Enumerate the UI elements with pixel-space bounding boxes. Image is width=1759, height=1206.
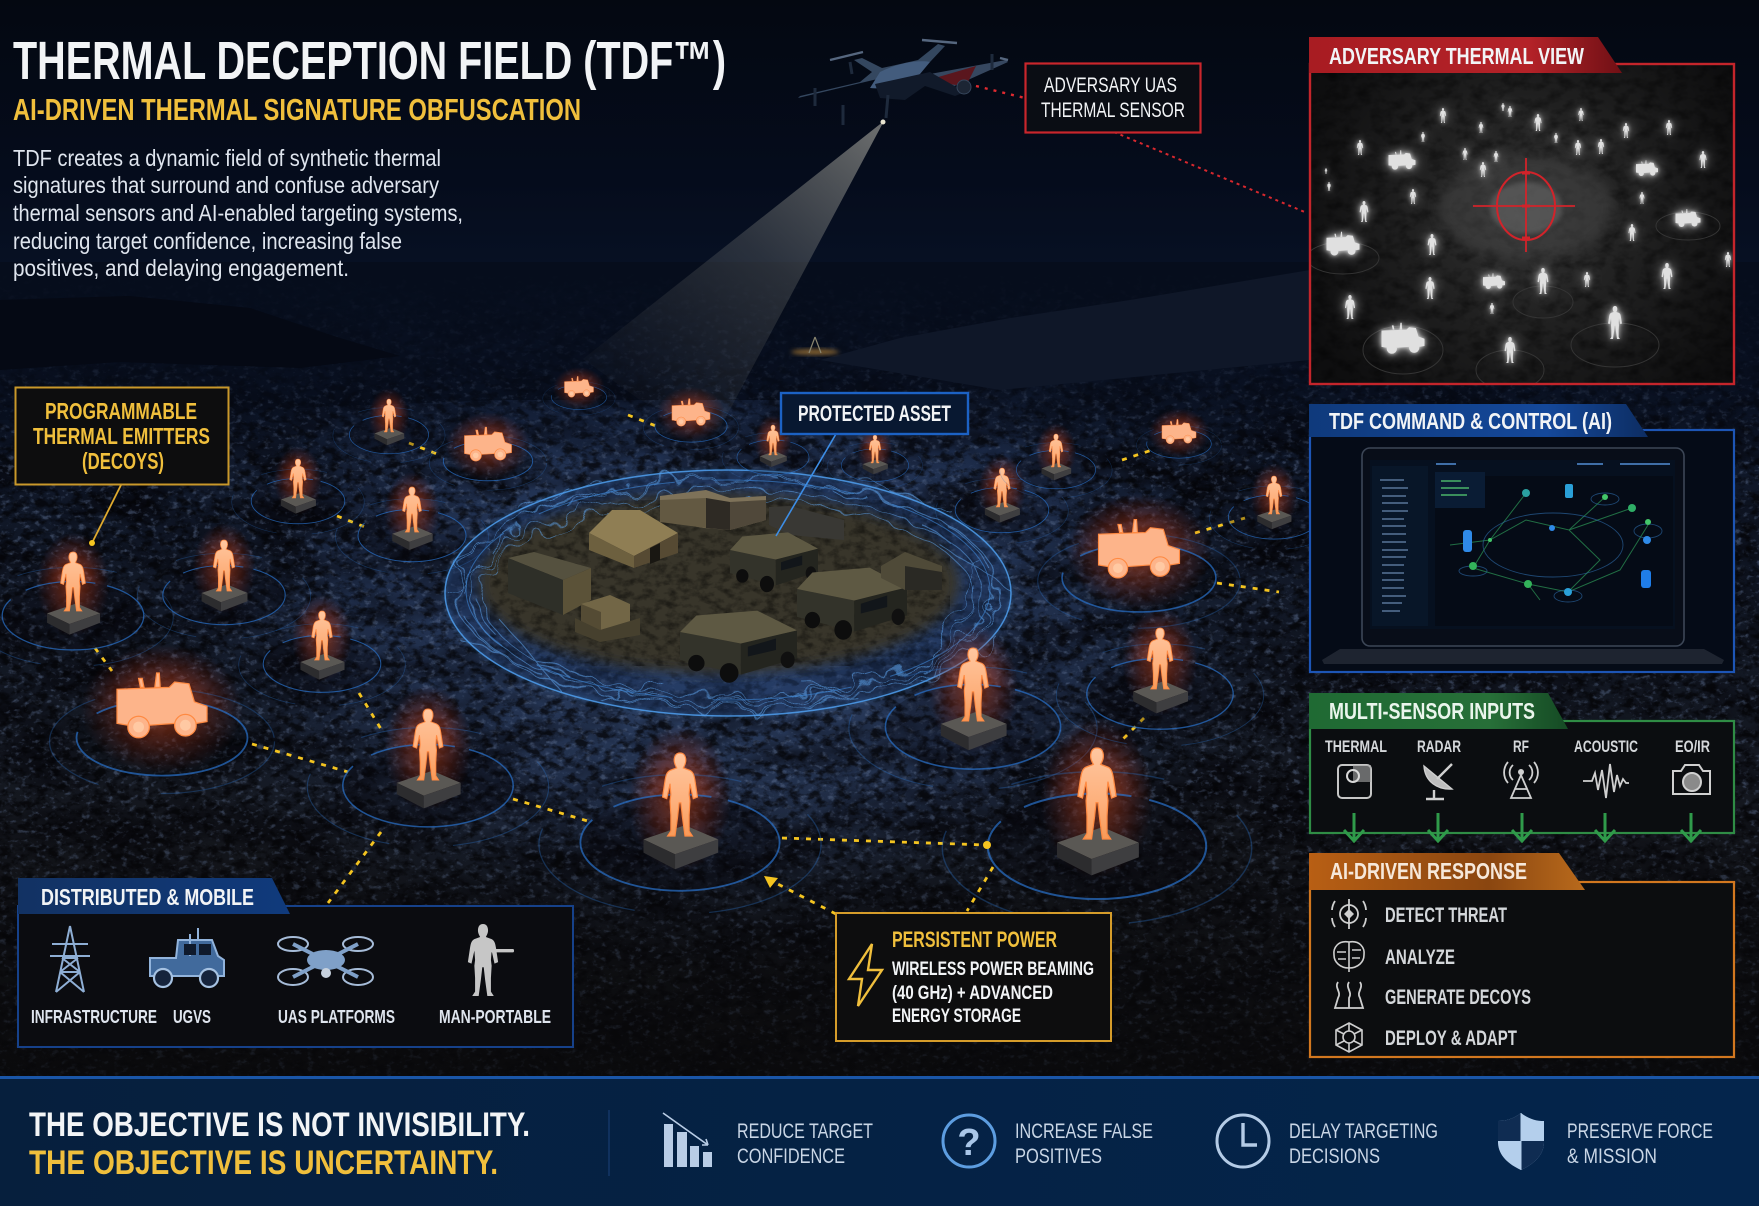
asset: cargo cluster	[881, 552, 942, 590]
callout: protected asset: PROTECTED ASSET	[798, 401, 951, 426]
yellow connector links	[95, 415, 1279, 914]
metric: delay targeting decisions	[1289, 1119, 1438, 1168]
callout: programmable thermal emitters: (DECOYS)	[82, 448, 164, 474]
sensor: acoustic	[1574, 738, 1638, 798]
decoy person west	[239, 595, 405, 706]
metric: reduce target confidence: REDUCE TARGET	[737, 1119, 873, 1143]
panel: multi-sensor inputs	[1310, 721, 1734, 841]
decoy person upper left	[232, 446, 364, 535]
icon: question mark	[943, 1115, 995, 1167]
icon: lightning bolt	[849, 944, 882, 1006]
callout: adversary UAS thermal sensor	[1026, 64, 1200, 132]
yellow node	[983, 841, 991, 849]
callout: programmable thermal emitters	[16, 388, 228, 546]
tab: command and control: TDF COMMAND & CONTROL (AI)	[1329, 408, 1612, 434]
metric: reduce target confidence	[737, 1119, 873, 1168]
metric: delay targeting decisions: DELAY TARGETING	[1289, 1119, 1438, 1143]
arrow head to dome	[764, 876, 778, 888]
icon: UGV truck	[150, 928, 224, 987]
decoy vehicle north	[644, 387, 738, 450]
sensor: acoustic: ACOUSTIC	[1574, 738, 1638, 756]
background sky	[0, 0, 1759, 300]
callout: persistent power: WIRELESS POWER BEAMING	[892, 958, 1094, 980]
tab: adversary thermal view	[1309, 37, 1622, 73]
callout: programmable thermal emitters: PROGRAMMABLE	[45, 398, 197, 424]
sensor cone beam	[583, 121, 884, 432]
callout: protected asset	[776, 393, 968, 536]
sensor: RF	[1504, 738, 1538, 798]
tab: multi-sensor inputs	[1309, 693, 1568, 729]
red dotted link: sensor label to thermal view	[1114, 132, 1307, 213]
decoy vehicle west	[49, 644, 274, 794]
decoy person south	[539, 726, 821, 914]
tab: distributed and mobile	[18, 878, 290, 914]
icon: infrastructure tower	[50, 926, 90, 992]
icon: question mark: ?	[957, 1122, 981, 1164]
sensor: radar: RADAR	[1417, 738, 1461, 756]
step: generate decoys: GENERATE DECOYS	[1385, 986, 1531, 1009]
metric: preserve force and mission	[1567, 1119, 1713, 1168]
icon: clock	[1217, 1115, 1269, 1167]
sensor: thermal	[1325, 738, 1387, 798]
panel: adversary thermal view	[1307, 64, 1734, 390]
metric: reduce target confidence: CONFIDENCE	[737, 1144, 845, 1168]
terrain	[0, 262, 1759, 1078]
asset: armored vehicle A	[730, 532, 818, 592]
target reticle	[1473, 158, 1575, 252]
decoy person south east	[849, 624, 1097, 790]
subtitle: AI-DRIVEN THERMAL SIGNATURE OBFUSCATION	[13, 92, 581, 127]
drone	[798, 40, 1008, 125]
horizon lights	[791, 337, 839, 355]
sensor: radar	[1417, 738, 1461, 799]
callout: persistent power: PERSISTENT POWER	[892, 927, 1057, 952]
decoy person lower left	[307, 686, 549, 847]
tab: AI-driven response	[1309, 853, 1585, 890]
objective statement	[29, 1106, 530, 1182]
callout: programmable thermal emitters: THERMAL EMITTERS	[33, 423, 210, 449]
bottom banner	[0, 1076, 1759, 1206]
icon: UAS platform drone	[278, 937, 373, 985]
callout: persistent power	[836, 913, 1111, 1041]
asset: tent	[589, 510, 678, 568]
icon: shield	[1498, 1113, 1544, 1170]
decoy vehicle north west	[429, 412, 547, 490]
title: THERMAL DECEPTION FIELD (TDF™)	[13, 31, 726, 91]
tab: command and control	[1309, 404, 1648, 437]
step: analyze: ANALYZE	[1385, 946, 1455, 969]
step: deploy and adapt	[1336, 1023, 1517, 1052]
decoy emitters	[0, 367, 1339, 925]
panel: AI-driven response	[1310, 882, 1734, 1057]
description: signatures that surround and confuse adversary	[13, 172, 439, 198]
label: infrastructure: INFRASTRUCTURE	[31, 1006, 157, 1027]
metric: increase false positives	[1015, 1119, 1153, 1168]
metric: increase false positives: INCREASE FALSE	[1015, 1119, 1153, 1143]
icon: falling bars	[663, 1113, 712, 1167]
callout: persistent power: ENERGY STORAGE	[892, 1005, 1021, 1027]
description: positives, and delaying engagement.	[13, 255, 349, 281]
callout: adversary UAS thermal sensor: ADVERSARY UAS	[1044, 74, 1177, 97]
asset: armored vehicle C	[680, 611, 797, 683]
description	[13, 145, 463, 281]
decoy person north	[722, 415, 824, 483]
asset: shipping container	[508, 552, 591, 615]
tab: adversary thermal view: ADVERSARY THERMAL VIEW	[1329, 43, 1584, 69]
asset: huts	[660, 490, 844, 540]
asset: armored vehicle B	[797, 568, 907, 640]
decoy person lower right	[942, 718, 1252, 925]
step: analyze	[1334, 942, 1455, 972]
step: generate decoys	[1335, 982, 1531, 1009]
decoy vehicle north east	[1136, 409, 1222, 465]
decoy person left	[137, 523, 311, 639]
callout: persistent power: (40 GHz) + ADVANCED	[892, 982, 1053, 1004]
step: deploy and adapt: DEPLOY & ADAPT	[1385, 1027, 1517, 1050]
description: reducing target confidence, increasing false	[13, 228, 402, 254]
decoy person north east	[936, 455, 1068, 544]
flow arrows	[1344, 813, 1701, 841]
metric: preserve force and mission: PRESERVE FORCE	[1567, 1119, 1713, 1143]
label: man-portable: MAN-PORTABLE	[439, 1006, 551, 1027]
decoy vehicle north small	[543, 367, 615, 415]
step: detect threat: DETECT THREAT	[1385, 904, 1507, 927]
tab: distributed and mobile: DISTRIBUTED & MOBILE	[41, 884, 254, 910]
decoy person mid left	[336, 472, 488, 574]
sensor: thermal: THERMAL	[1325, 738, 1387, 756]
sensor: EO/IR: EO/IR	[1675, 738, 1710, 756]
thermal central hotspot	[1307, 103, 1731, 390]
objective statement: THE OBJECTIVE IS UNCERTAINTY.	[29, 1144, 498, 1182]
description: TDF creates a dynamic field of synthetic thermal	[13, 145, 441, 171]
decoy person east	[1056, 608, 1264, 746]
sensor: EO/IR	[1673, 738, 1710, 794]
laptop	[1322, 448, 1724, 664]
decoy person far north east	[1000, 423, 1112, 498]
step: detect threat	[1332, 899, 1507, 929]
metric: delay targeting decisions: DECISIONS	[1289, 1144, 1380, 1168]
decoy person far upper left	[333, 388, 445, 463]
description: thermal sensors and AI-enabled targeting systems,	[13, 200, 463, 226]
decoy vehicle east	[1038, 494, 1240, 628]
metric: increase false positives: POSITIVES	[1015, 1144, 1102, 1168]
label: UAS platforms: UAS PLATFORMS	[278, 1006, 395, 1027]
decoy person far east	[1209, 463, 1339, 550]
label: UGVs: UGVS	[173, 1006, 211, 1027]
red dotted link: drone to sensor label	[976, 86, 1025, 98]
tab: multi-sensor inputs: MULTI-SENSOR INPUTS	[1329, 698, 1535, 724]
objective statement: THE OBJECTIVE IS NOT INVISIBILITY.	[29, 1106, 530, 1144]
icon: man-portable soldier	[468, 924, 514, 996]
callout: adversary UAS thermal sensor: THERMAL SENSOR	[1041, 99, 1185, 122]
panel: distributed and mobile	[18, 906, 573, 1047]
protected asset dome	[445, 470, 1011, 716]
decoy person north behind label	[827, 426, 923, 489]
panel: TDF command and control	[1310, 430, 1734, 672]
asset: supply crates	[575, 595, 640, 642]
sensor: RF: RF	[1513, 738, 1529, 756]
decoy person far left	[0, 533, 173, 666]
metric: preserve force and mission: & MISSION	[1567, 1144, 1657, 1168]
tab: AI-driven response: AI-DRIVEN RESPONSE	[1330, 858, 1527, 884]
